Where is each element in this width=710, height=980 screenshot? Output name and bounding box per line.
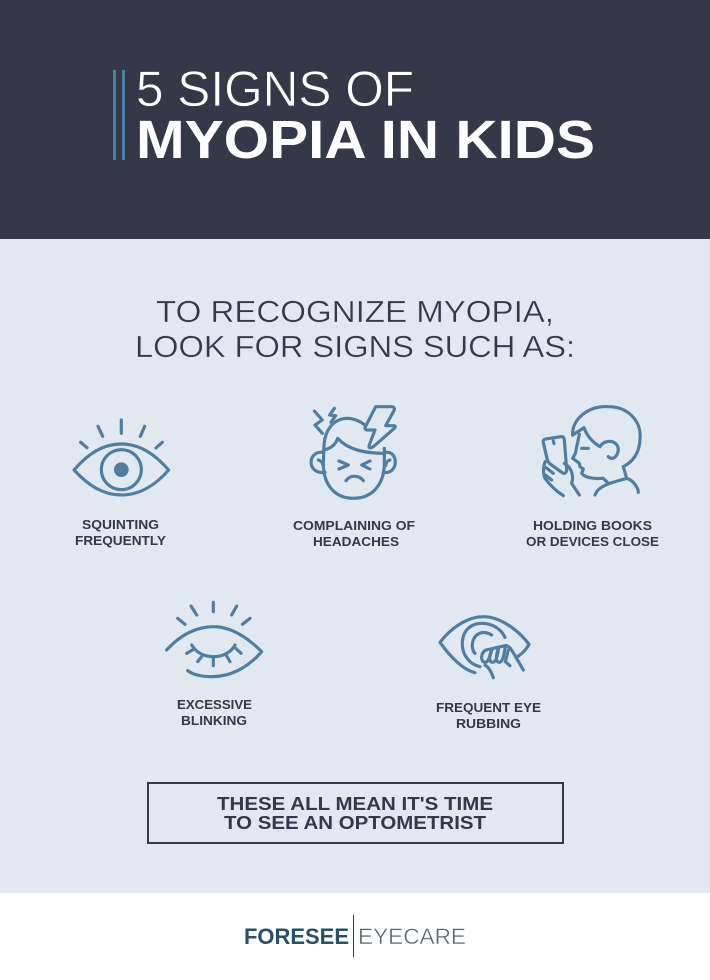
logo: FORESEE [244,924,349,949]
heading: LOOK FOR SIGNS SUCH AS: [135,329,575,364]
icon: headache [311,407,395,498]
callout: TO SEE AN OPTOMETRIST [224,813,486,833]
label: headaches [293,518,415,549]
icon: child holding phone close [543,407,640,496]
title: 5 SIGNS OF [136,61,414,117]
heading: TO RECOGNIZE MYOPIA, [156,294,554,329]
accent bars [113,70,125,160]
heading [135,294,575,364]
label: holding close [526,518,659,549]
title [136,61,595,170]
label: squinting: SQUINTING [82,517,159,532]
title: MYOPIA IN KIDS [136,110,595,170]
label: rubbing: FREQUENT EYE [436,700,541,715]
label: rubbing [436,700,541,731]
icon: open eye [74,420,169,495]
panel: header [0,0,710,239]
logo [244,915,466,957]
label: blinking [177,697,252,728]
label: headaches: HEADACHES [313,534,399,549]
label: holding close: HOLDING BOOKS [533,518,652,533]
callout: THESE ALL MEAN IT'S TIME [217,794,493,814]
label: blinking: EXCESSIVE [177,697,252,712]
panel: signs [0,239,710,893]
label: rubbing: RUBBING [456,716,521,731]
icon: eye rubbing [440,617,529,678]
label: headaches: COMPLAINING OF [293,518,415,533]
label: squinting: FREQUENTLY [75,533,166,548]
callout [148,783,563,843]
label: squinting [75,517,166,548]
icon: blinking eye [167,602,262,677]
label: holding close: OR DEVICES CLOSE [526,534,659,549]
label: blinking: BLINKING [181,713,247,728]
logo: EYECARE [358,924,466,949]
